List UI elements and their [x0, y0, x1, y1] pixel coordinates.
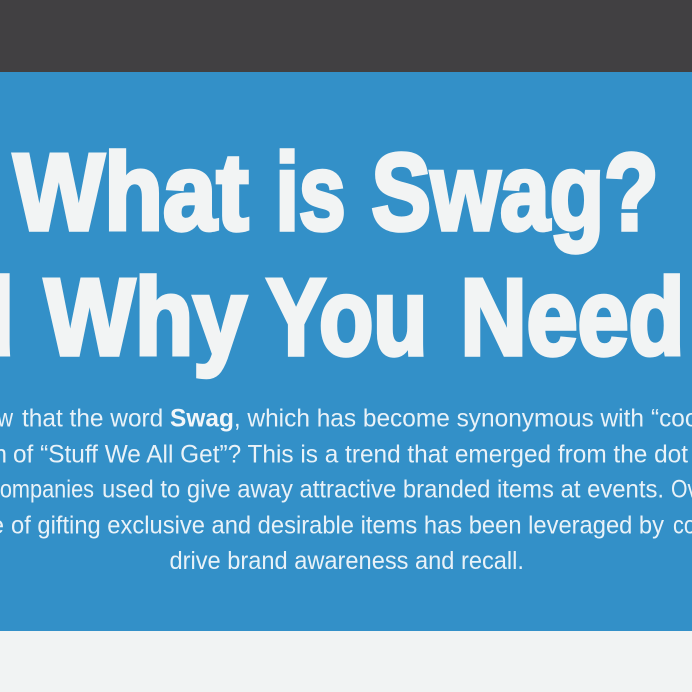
body paragraph: drive brand awareness and recall. — [170, 548, 524, 575]
body paragraph: that the word Swag, which has become synonymous with — [22, 406, 644, 433]
top dark band — [0, 0, 692, 72]
body paragraph: used to give away attractive branded items at events. — [102, 477, 664, 504]
title: What — [14, 132, 248, 254]
bottom light band — [0, 631, 692, 692]
body paragraph — [0, 406, 692, 575]
body paragraph: of gifting exclusive and desirable items has been leveraged by — [11, 512, 665, 539]
title: Why — [44, 257, 247, 379]
body paragraph: of “Stuff We All Get”? This is a trend that emerged from the dot — [13, 441, 688, 468]
title — [0, 132, 692, 379]
title: You — [266, 257, 428, 379]
title: is — [276, 132, 346, 254]
